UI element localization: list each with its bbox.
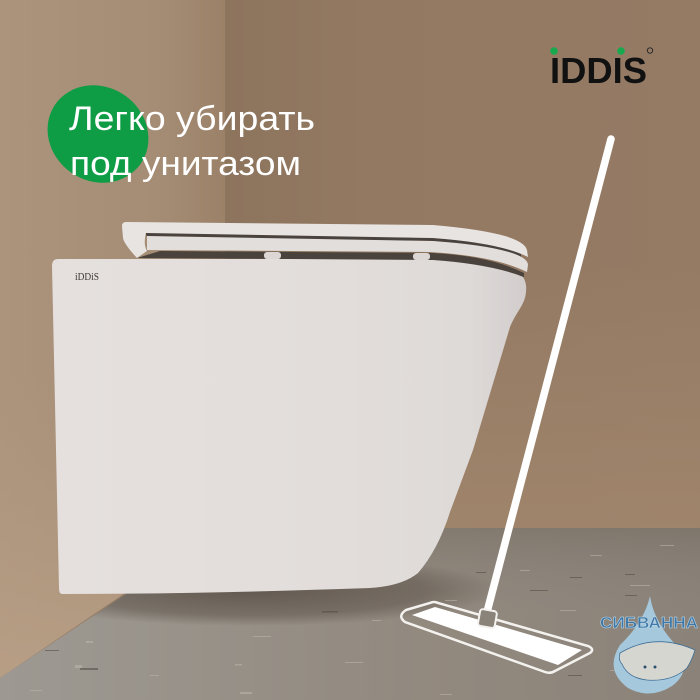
heading bbox=[69, 100, 315, 183]
lid gap bbox=[145, 232, 521, 257]
mop handle bbox=[487, 139, 611, 612]
background: left wall bbox=[0, 0, 225, 678]
watermark name: СИБВАННА bbox=[600, 615, 698, 632]
watermark: Sibvanna bbox=[600, 596, 698, 694]
mop connector bbox=[478, 609, 497, 628]
background: right wall bbox=[225, 0, 700, 530]
toilet bowl bbox=[52, 259, 526, 594]
watermark tub bbox=[619, 642, 695, 680]
toilet seat shadow gap bbox=[137, 251, 524, 277]
bowl logo: iDDiS bbox=[75, 271, 99, 283]
mop pad bbox=[412, 607, 582, 665]
toilet lid bbox=[122, 222, 528, 258]
heading: под унитазом bbox=[70, 145, 301, 183]
background: floor bbox=[0, 528, 700, 700]
toilet bbox=[52, 222, 528, 594]
watermark drop bbox=[614, 596, 684, 694]
heading: Легко убирать bbox=[69, 100, 315, 138]
watermark face bbox=[644, 666, 656, 668]
green accent blob bbox=[28, 66, 168, 202]
mop head outline bbox=[401, 602, 592, 673]
brand logo: IDDIS: IDDIS bbox=[550, 50, 647, 91]
mop illustration bbox=[401, 139, 611, 673]
toilet seat bbox=[147, 236, 528, 272]
seat buffers bbox=[264, 252, 430, 260]
